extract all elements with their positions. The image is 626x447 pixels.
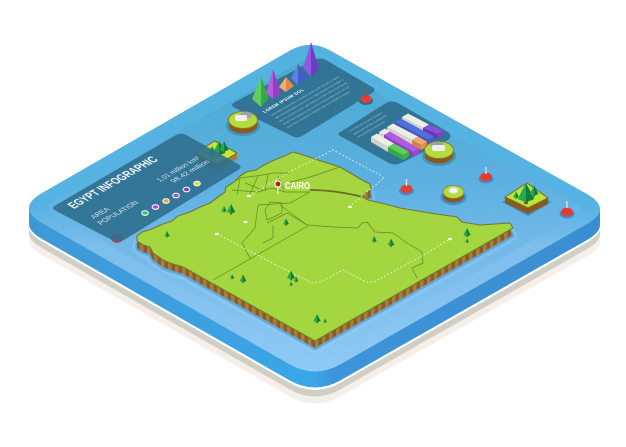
card body text: lobortis nisl ut aliquip ex ea commodo consequat duis autem vel eum xyxy=(281,85,351,126)
bar 1 xyxy=(371,134,409,160)
buoy: red 2 xyxy=(399,179,414,196)
island: forest (right) xyxy=(502,183,551,216)
heading: Egypt Infographic: EGYPT INFOGRAPHIC xyxy=(64,154,161,211)
pyramid chart xyxy=(252,42,319,107)
gear: right xyxy=(430,142,445,151)
gulf channel xyxy=(310,190,363,197)
island: round small xyxy=(440,186,466,205)
province borders xyxy=(213,167,423,280)
bar chart xyxy=(371,114,443,160)
buoy: red 4 xyxy=(560,201,574,218)
gear: top-left xyxy=(235,112,252,121)
land surface xyxy=(137,152,513,341)
card body text: Lorem ipsum dolor sit amet, consectetuer adipiscing elit, sed diam nonummy xyxy=(269,75,341,117)
trees xyxy=(164,204,471,323)
island: forest (left, under panel) xyxy=(195,141,237,171)
bar card body text: euismod tincidunt ut laoreet dolore xyxy=(355,120,387,139)
label: area: AREA xyxy=(88,206,112,220)
buoy: red top xyxy=(359,89,373,105)
land coastal ripple xyxy=(137,160,513,349)
legend dots xyxy=(142,181,200,215)
bar 4 xyxy=(395,118,434,145)
label: population: POPULATION xyxy=(95,199,141,226)
card body text: wisi enim ad minim veniam, quis nostrud exerci tation ullamcorper suscipit xyxy=(277,81,349,123)
island: round top-left xyxy=(226,112,260,136)
pyramid: orange xyxy=(279,77,294,92)
pyramid: magenta xyxy=(266,69,281,99)
card body text: iriure dolor in hendrerit in vulputate velit esse molestie consequat xyxy=(285,90,351,129)
card body text xyxy=(269,75,351,129)
island: round right xyxy=(422,142,456,166)
bar card body text: adipiscing elit sed diam nonummy nibh xyxy=(351,114,388,136)
gear: small xyxy=(449,188,458,194)
board side xyxy=(29,61,600,388)
bar 5 xyxy=(402,114,443,139)
bar card body text: Lorem ipsum dolor sit amet consectetuer xyxy=(347,111,384,133)
land wall xyxy=(137,159,513,348)
bar card body text xyxy=(347,111,388,139)
label: Cairo: CAIRO xyxy=(285,181,310,192)
board base shadow xyxy=(29,63,600,404)
buoy: red 3 xyxy=(478,167,494,184)
pyramid: purple xyxy=(303,42,319,77)
panel: Egypt infographic summary xyxy=(53,134,240,242)
bar 3 xyxy=(387,124,427,150)
card body text: nibh euismod tincidunt ut laoreet dolore magna aliquam erat volutpat ut xyxy=(273,78,345,120)
map: Egypt xyxy=(137,150,513,349)
bar 2 xyxy=(379,128,419,157)
value: population: 98.42 million xyxy=(168,158,212,184)
pyramid: blue xyxy=(291,64,307,85)
value: area: 1.01 million km² xyxy=(154,155,203,183)
dark buoy under panel xyxy=(111,228,123,243)
card heading: LOREM IPSUM DOL xyxy=(262,88,307,114)
panel: lorem ipsum text card xyxy=(232,58,374,138)
board water surface xyxy=(29,45,600,372)
route markers xyxy=(215,195,452,240)
pin: Cairo xyxy=(275,181,281,194)
panel: bar chart card xyxy=(338,102,450,164)
dashed routes xyxy=(217,150,450,283)
pyramid: green xyxy=(252,77,269,107)
